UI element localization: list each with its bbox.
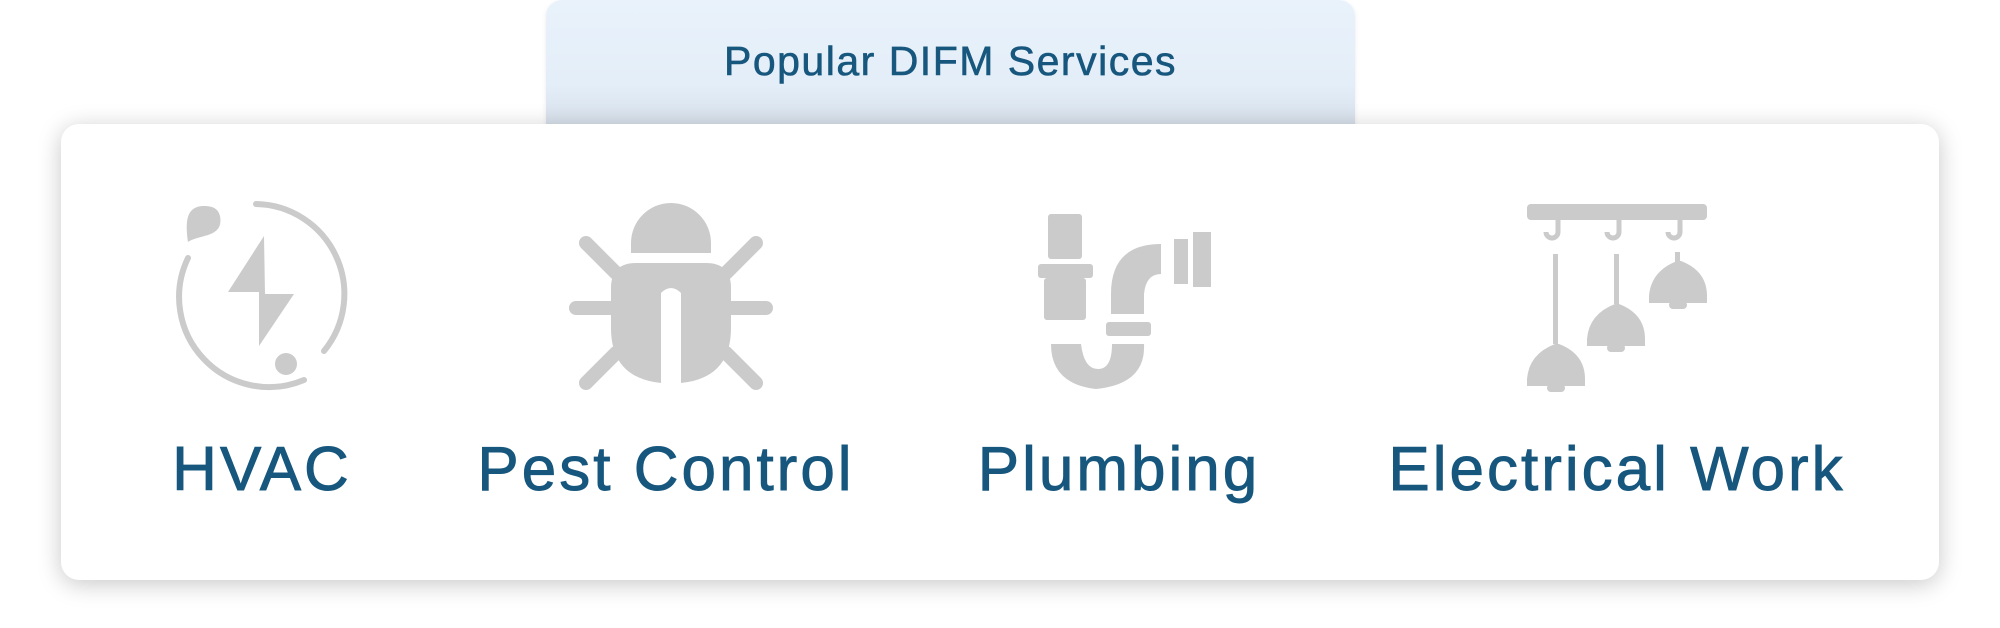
icon: bug [569, 203, 773, 390]
label: HVAC: HVAC [172, 435, 352, 504]
header tab [546, 0, 1355, 140]
label: Plumbing: Plumbing [978, 435, 1260, 504]
header tab: Popular DIFM Services [724, 38, 1177, 84]
label: Pest Control: Pest Control [477, 435, 855, 504]
icon: hvac [176, 201, 348, 390]
icon: hanging lamps [1527, 204, 1707, 392]
panel: services card [61, 124, 1939, 580]
label: Electrical Work: Electrical Work [1388, 435, 1846, 504]
icon: plumbing [1038, 214, 1211, 389]
